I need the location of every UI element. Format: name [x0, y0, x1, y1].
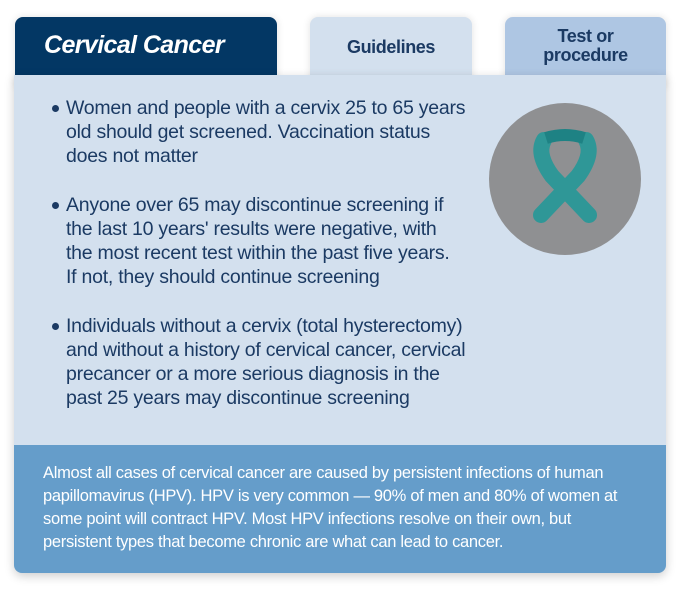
bullet 3: past 25 years may discontinue screening: [66, 387, 410, 409]
bullet 2: [66, 193, 666, 289]
bullet 2: the last 10 years' results were negative, with: [66, 218, 436, 240]
bullet list: [52, 97, 465, 409]
bullet 2: If not, they should continue screening: [66, 266, 380, 288]
info callout: [14, 445, 666, 573]
bullet 1: does not matter: [66, 145, 198, 167]
tab: Cervical Cancer title: [15, 17, 277, 87]
bullet 3: precancer or a more serious diagnosis in the: [66, 363, 440, 385]
bullet 1: Women and people with a cervix 25 to 65 years: [66, 97, 465, 119]
tab: Guidelines: Guidelines: [347, 37, 435, 57]
info callout: some point will contract HPV. Most HPV infections resolve on their own, but: [43, 510, 571, 528]
info callout: papillomavirus (HPV). HPV is very common — 90% of men and 80% of women at: [43, 487, 617, 505]
tab: Guidelines: [310, 17, 472, 87]
bullet 2: Anyone over 65 may discontinue screening if: [66, 194, 443, 216]
tab: Test or procedure: procedure: [543, 45, 628, 65]
bullet 2: the most recent test within the past five years.: [66, 242, 450, 264]
info callout: persistent types that become chronic are what can lead to cancer.: [43, 533, 503, 551]
info callout: Almost all cases of cervical cancer are caused by persistent infections of human: [43, 464, 603, 482]
bullet 1: [66, 96, 666, 168]
icon: ribbon in circle: [489, 103, 641, 255]
tab: Cervical Cancer title: Cervical Cancer: [44, 31, 224, 59]
bullet 1: old should get screened. Vaccination status: [66, 121, 430, 143]
bullet 3: and without a history of cervical cancer, cervical: [66, 339, 465, 361]
bullet 3: [66, 314, 666, 410]
bullet 3: Individuals without a cervix (total hysterectomy): [66, 315, 462, 337]
tab: Test or procedure: Test or: [558, 26, 613, 46]
tab: Test or procedure: [505, 17, 666, 87]
